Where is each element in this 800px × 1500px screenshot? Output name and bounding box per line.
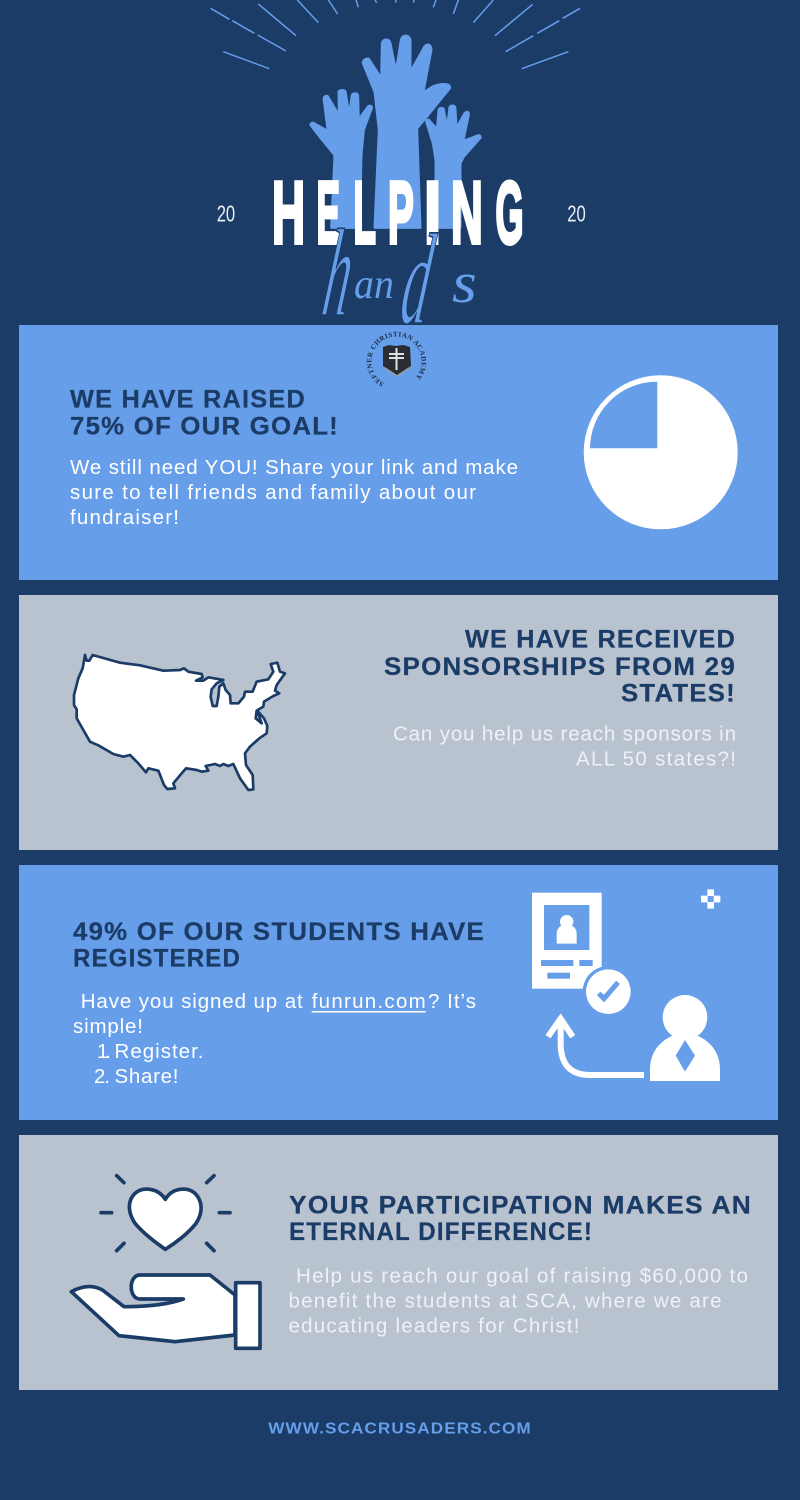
heading: we have raised: WE HAVE RAISED <box>70 385 306 413</box>
heading: students registered: REGISTERED <box>73 945 241 973</box>
year left: 20 <box>217 200 235 226</box>
text: sign up steps: 1. <box>97 1040 111 1063</box>
heading: we have raised: 75% OF OUR GOAL! <box>70 412 339 440</box>
heading: eternal difference: YOUR PARTICIPATION MAKES AN <box>289 1191 752 1219</box>
text: sign up steps <box>73 990 476 1088</box>
pie chart: 75 percent <box>584 375 738 529</box>
panel: student registration <box>19 865 778 1120</box>
text: sign up steps: Share! <box>114 1065 178 1088</box>
sunburst rays <box>211 0 580 69</box>
heading word HELPING: G <box>496 164 524 263</box>
script word hands: an <box>354 260 394 307</box>
heading: we have raised <box>70 385 339 440</box>
open hand <box>71 1275 235 1342</box>
text: sign up steps: simple! <box>73 1015 143 1038</box>
sparkle <box>701 889 720 909</box>
text: still need you: fundraiser! <box>70 506 179 529</box>
year right: 20 <box>567 200 586 226</box>
text: all 50 states: Can you help us reach sponsors in <box>393 723 736 746</box>
heading word HELPING: L <box>353 165 376 263</box>
script word hands <box>316 204 477 351</box>
heading: sponsorships: WE HAVE RECEIVED <box>465 625 736 653</box>
heading: sponsorships: STATES! <box>621 680 736 708</box>
script word hands: h <box>316 204 362 342</box>
icon: heart over open hand <box>71 1176 260 1348</box>
title: Helping Hands 2020 <box>211 0 586 351</box>
icon: registration form and person <box>532 889 720 1081</box>
map: United States <box>74 655 285 790</box>
heading: eternal difference: ETERNAL DIFFERENCE! <box>289 1218 593 1246</box>
icon: three raised hands <box>311 36 480 227</box>
heading word HELPING: N <box>451 163 483 262</box>
text: sign up steps: Register. <box>114 1040 204 1063</box>
heading: sponsorships: SPONSORSHIPS FROM 29 <box>384 653 736 681</box>
heading word HELPING <box>272 163 524 263</box>
heading word HELPING: P <box>388 164 414 262</box>
text: sign up steps: funrun.com <box>312 990 426 1013</box>
text: still need you: We still need YOU! Share your link and make <box>70 456 518 479</box>
heart <box>129 1189 201 1249</box>
panel: participation <box>19 1135 778 1390</box>
text: reach our goal <box>288 1264 748 1337</box>
text: sign up steps: ? It’s <box>428 990 476 1013</box>
text: sign up steps: 2. <box>94 1065 110 1088</box>
text: all 50 states: ALL 50 states?! <box>576 748 736 771</box>
text: reach our goal: educating leaders for Christ! <box>288 1314 580 1337</box>
text: sign up steps: Have you signed up at <box>81 990 303 1013</box>
registration form <box>532 893 602 989</box>
heading: students registered: 49% OF OUR STUDENTS HAVE <box>73 918 485 946</box>
person <box>650 995 720 1081</box>
text: all 50 states <box>393 723 736 771</box>
text: reach our goal: Help us reach our goal of raising $60,000 to <box>296 1264 748 1287</box>
panel: fundraising goal <box>19 325 778 580</box>
footer: website: WWW.SCACRUSADERS.COM <box>268 1420 532 1437</box>
cuff <box>236 1283 260 1348</box>
rays <box>101 1176 230 1251</box>
logo: school seal: SEFTNER CHRISTIAN ACADEMY <box>366 332 426 386</box>
script word hands: s <box>452 252 477 315</box>
heading word HELPING: E <box>316 164 340 263</box>
arrow <box>548 1019 644 1075</box>
heading: students registered <box>73 918 485 973</box>
heading word HELPING: I <box>424 164 441 263</box>
check badge <box>583 966 634 1017</box>
text: still need you <box>70 456 518 529</box>
heading: eternal difference <box>289 1191 752 1246</box>
panel: sponsorship states <box>19 595 778 850</box>
text: still need you: sure to tell friends and family about our <box>70 481 476 504</box>
heading word HELPING: H <box>272 164 305 262</box>
text: reach our goal: benefit the students at SCA, where we are <box>288 1289 722 1312</box>
script word hands: d <box>394 207 442 351</box>
heading: sponsorships <box>384 625 736 708</box>
